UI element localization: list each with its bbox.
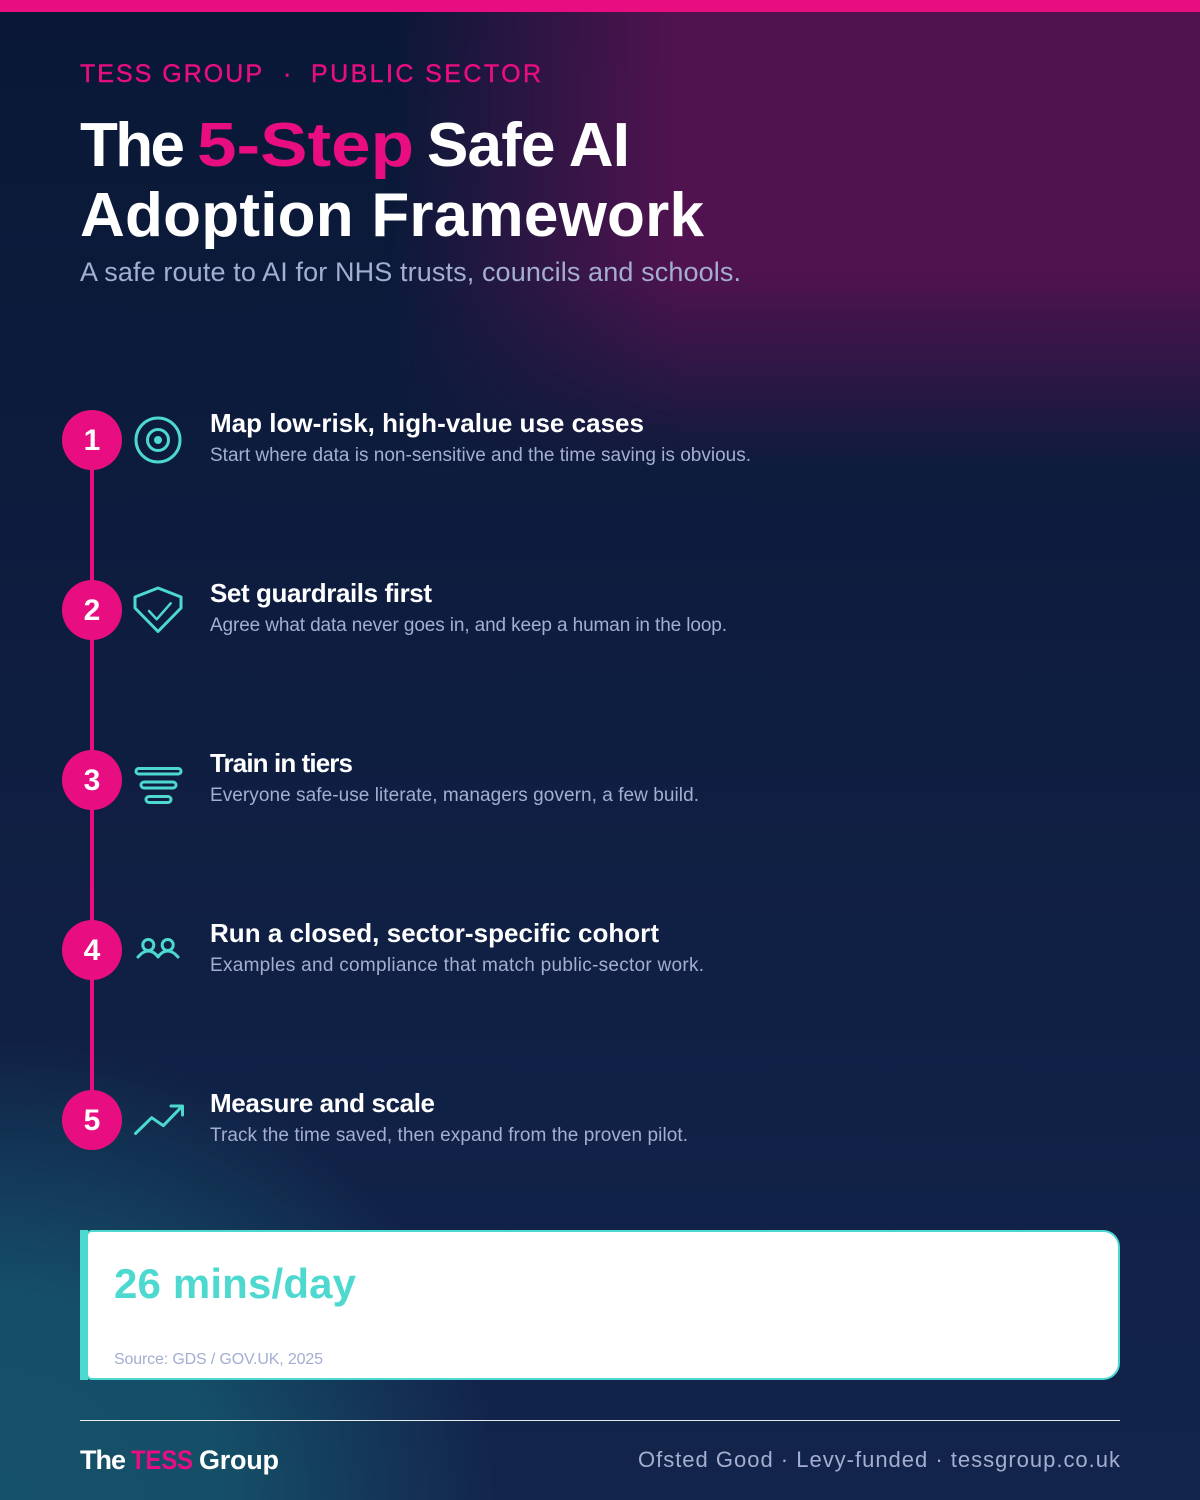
top accent bar: [0, 0, 1200, 12]
step 3 text: Everyone safe-use literate, managers govern, a few build.: [210, 785, 699, 806]
timeline connector: [90, 440, 94, 1120]
title: Adoption Framework: [80, 181, 705, 250]
source: Source: GDS / GOV.UK, 2025: [114, 1351, 323, 1368]
step 2 text: Agree what data never goes in, and keep a human in the loop.: [210, 615, 727, 636]
card body: [87, 1231, 1119, 1379]
title: 5-Step: [197, 111, 414, 180]
title: [80, 111, 705, 250]
step 1 text: Start where data is non-sensitive and the time saving is obvious.: [210, 445, 751, 466]
step 5 number: [62, 1090, 122, 1150]
step 4 text: [210, 918, 704, 976]
card accent bar: [80, 1230, 88, 1380]
title: Safe AI: [427, 111, 630, 180]
footer rule: [80, 1420, 1120, 1421]
step 2 number: 2: [84, 594, 100, 627]
step 5 text: Measure and scale: [210, 1088, 435, 1118]
title: The: [80, 111, 185, 180]
footer logo: The: [80, 1445, 126, 1475]
step 5 text: [210, 1088, 688, 1146]
step 2: [62, 578, 727, 640]
step 4 text: Run a closed, sector-specific cohort: [210, 918, 659, 948]
icon: people: [138, 940, 178, 957]
step 5: [62, 1088, 688, 1150]
step 2 text: [210, 578, 727, 636]
step 3 number: [62, 750, 122, 810]
step 1 number: [62, 410, 122, 470]
eyebrow: TESS GROUP: [80, 60, 262, 88]
step 4 number: 4: [84, 934, 101, 967]
stat value: 26 mins/day: [114, 1260, 357, 1307]
step 4 number: [62, 920, 122, 980]
step 1: [62, 408, 751, 470]
step 1 text: Map low-risk, high-value use cases: [210, 408, 644, 438]
footer logo: [80, 1445, 279, 1475]
step 3 text: Train in tiers: [210, 748, 353, 778]
step 3 number: 3: [84, 764, 100, 797]
eyebrow: PUBLIC SECTOR: [311, 60, 541, 88]
eyebrow: [80, 60, 541, 88]
step 4: [62, 918, 704, 980]
footer logo: TESS: [131, 1445, 193, 1475]
subtitle: A safe route to AI for NHS trusts, councils and schools.: [80, 257, 741, 287]
step 2 number: [62, 580, 122, 640]
eyebrow: ·: [283, 60, 291, 88]
step 1 text: [210, 408, 751, 466]
step 5 text: Track the time saved, then expand from the proven pilot.: [210, 1125, 688, 1146]
icon: trend arrow: [136, 1106, 182, 1134]
step 3: [62, 748, 699, 810]
icon: target: [136, 418, 180, 462]
step 5 number: 5: [84, 1104, 100, 1137]
step 2 text: Set guardrails first: [210, 578, 432, 608]
step 4 text: Examples and compliance that match public-sector work.: [210, 955, 704, 976]
icon: shield check: [135, 588, 181, 632]
step 3 text: [210, 748, 699, 806]
footer details: Ofsted Good · Levy-funded · tessgroup.co.uk: [638, 1447, 1121, 1472]
footer logo: Group: [199, 1445, 279, 1475]
step 1 number: 1: [84, 424, 100, 457]
stat card: [80, 1230, 1119, 1380]
icon: tiers: [136, 768, 181, 802]
